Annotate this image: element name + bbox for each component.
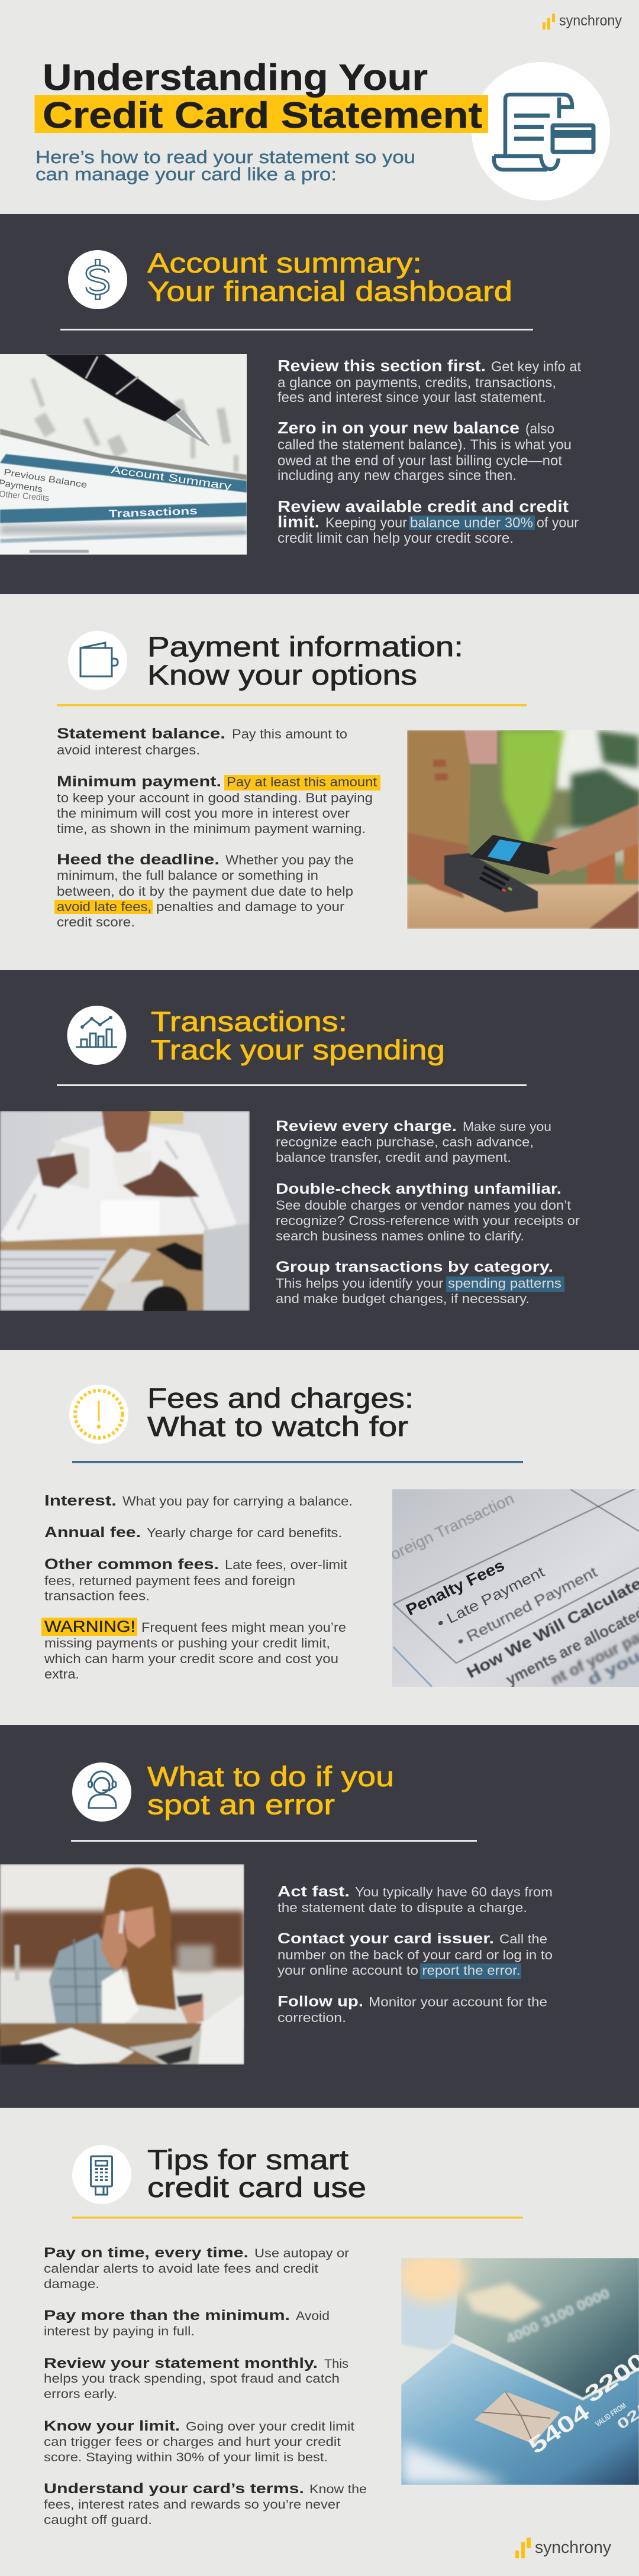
highlight: balance under 30%: balance under 30% (410, 515, 533, 531)
subtitle (36, 147, 415, 184)
photo: statement and pen: Transactions (108, 505, 198, 520)
icon: dollar sign (68, 250, 127, 309)
photo: credit cards close-up: 4000 3100 0000 (504, 2286, 612, 2347)
text: annual fee (44, 1524, 342, 1541)
text: group transactions by category: Group transactions by category. (276, 1259, 553, 1275)
heading (147, 2144, 366, 2203)
text: zero in on your new balance: Zero in on your new balance (277, 419, 519, 437)
text: act fast (277, 1884, 553, 1915)
heading: spot an error (147, 1789, 335, 1820)
text: interest (44, 1492, 353, 1509)
text: heed the deadline: between, do it by the payment due date to help (57, 884, 353, 899)
text: understand your card's terms: Know the (309, 2483, 367, 2496)
text: pay more than the minimum (44, 2308, 330, 2338)
photo: penalty fees statement: oreign Transaction (388, 1489, 517, 1563)
heading (151, 1006, 445, 1065)
text: heed the deadline: credit score. (57, 915, 135, 929)
heading: Payment information: (147, 631, 463, 662)
text: review your statement monthly: helps you track spending, spot fraud and catch (44, 2372, 340, 2386)
text: review your statement monthly: errors early. (44, 2387, 117, 2401)
photo: penalty fees statement: d your (585, 1643, 639, 1689)
photo: credit cards close-up: 5404 (524, 2400, 594, 2459)
icon: card terminal (72, 2145, 131, 2204)
text: act fast: Act fast. (277, 1884, 350, 1900)
text: double-check anything unfamiliar: See double charges or vendor names you don’t (276, 1198, 571, 1213)
text: review available credit: of your (537, 515, 579, 531)
text: contact your card issuer (277, 1930, 553, 1979)
text: pay on time: calendar alerts to avoid late fees and credit (44, 2262, 318, 2276)
heading (147, 1382, 414, 1442)
text: know your limit: Going over your credit limit (186, 2420, 354, 2434)
text: review this section first: a glance on payments, credits, transactions, (277, 375, 556, 391)
text: review available credit: credit limit can help your credit score. (277, 530, 514, 546)
panel: transactions (0, 970, 639, 1350)
text: warning: missing payments or pushing your credit limit, (44, 1635, 330, 1651)
text: review available credit (277, 497, 579, 546)
text: pay on time: Use autopay or (254, 2247, 349, 2260)
text: statement balance: Statement balance. (57, 725, 225, 742)
text: zero in on your new balance: owed at the end of your last billing cycle—not (277, 453, 562, 469)
text: warning: which can harm your credit score and cost you (44, 1651, 338, 1666)
text: other common fees: Other common fees. (44, 1556, 219, 1573)
text: group transactions by category (276, 1259, 564, 1306)
heading: Account summary: (147, 247, 422, 278)
text: warning (41, 1618, 346, 1681)
text: minimum payment: time, as shown in the minimum payment warning. (57, 821, 366, 836)
heading: What to do if you (147, 1761, 394, 1792)
photo: penalty fees statement: How We Will Calculate (464, 1574, 639, 1681)
panel: what to do if you spot an error (0, 1725, 639, 2108)
text: review every charge: balance transfer, credit and payment. (276, 1150, 511, 1165)
text: group transactions by category: and make budget changes, if necessary. (276, 1291, 530, 1306)
text: understand your card's terms: caught off guard. (44, 2513, 152, 2527)
text: review every charge: Review every charge. (276, 1118, 457, 1135)
heading: Tips for smart (147, 2144, 348, 2175)
text: know your limit: score. Staying within 30% of your limit is best. (44, 2451, 328, 2464)
title: Understanding Your (43, 57, 428, 98)
text: review available credit: limit. (277, 513, 320, 531)
text: minimum payment: to keep your account in good standing. But paying (57, 790, 373, 805)
text: pay more than the minimum: Pay more than the minimum. (44, 2308, 290, 2324)
text: heed the deadline (54, 851, 354, 929)
text: understand your card's terms (44, 2481, 367, 2527)
text: heed the deadline: Whether you pay the (225, 853, 354, 867)
heading (147, 1761, 394, 1820)
logo: synchrony bottom: synchrony (535, 2538, 611, 2557)
text: know your limit: Know your limit. (44, 2418, 180, 2434)
text: act fast: the statement date to dispute a charge. (277, 1900, 527, 1915)
text: minimum payment: Minimum payment. (57, 773, 221, 790)
highlight: report the error: report the error. (422, 1963, 521, 1978)
text: minimum payment (57, 773, 380, 836)
photo: contactless phone payment (407, 724, 639, 929)
text: heed the deadline: Heed the deadline. (57, 851, 220, 868)
heading (147, 631, 463, 691)
text: double-check anything unfamiliar: recognize? Cross-reference with your receipts or (276, 1213, 580, 1228)
text: review this section first: Review this section first. (277, 357, 486, 375)
text: understand your card's terms: Understand your card’s terms. (44, 2481, 304, 2497)
photo: statement and pen: Previous Balance (3, 467, 88, 490)
text: warning: extra. (44, 1667, 79, 1681)
text: zero in on your new balance: called the statement balance). This is what you (277, 437, 572, 453)
icon: statement and credit card (472, 62, 610, 200)
title: Credit Card Statement (43, 95, 482, 136)
subtitle: can manage your card like a pro: (36, 164, 337, 184)
text: follow up: correction. (277, 2010, 346, 2025)
heading: Know your options (147, 659, 417, 691)
icon: warning (69, 1385, 128, 1444)
text: act fast: You typically have 60 days from (355, 1885, 553, 1899)
text: know your limit: can trigger fees or charges and hurt your credit (44, 2435, 341, 2449)
heading: What to watch for (147, 1411, 408, 1442)
text: statement balance (57, 725, 347, 757)
photo: penalty fees statement (388, 1487, 639, 1689)
text: review this section first: fees and interest since your last statement. (277, 390, 546, 406)
photo: statement and pen: Account Summary (110, 464, 232, 492)
text: contact your card issuer: Contact your card issuer. (277, 1930, 494, 1947)
text: review every charge (276, 1118, 551, 1165)
photo: woman checking receipts (0, 1111, 250, 1311)
text: review this section first: Get key info at (491, 359, 581, 375)
text: follow up: Monitor your account for the (369, 1995, 547, 2009)
text: interest: What you pay for carrying a balance. (122, 1493, 353, 1509)
photo: credit cards close-up: VALID FROM (593, 2401, 628, 2428)
text: pay on time: damage. (44, 2277, 99, 2291)
text: review available credit: Review available credit and credit (277, 497, 569, 516)
text: zero in on your new balance: (also (525, 421, 554, 437)
heading: Your financial dashboard (147, 276, 512, 307)
photo: penalty fees statement: Penalty Fees (403, 1556, 507, 1619)
text: pay more than the minimum: interest by paying in full. (44, 2325, 195, 2338)
highlight: pay at least this amount: Pay at least this amount (227, 775, 377, 789)
photo: statement and pen (0, 354, 247, 555)
heading (147, 247, 512, 307)
text: follow up (277, 1994, 547, 2025)
heading: Track your spending (151, 1034, 445, 1065)
text: warning: Frequent fees might mean you’re (141, 1620, 346, 1635)
text: other common fees: transaction fees. (44, 1588, 150, 1603)
text: review your statement monthly (44, 2355, 348, 2401)
panel: tips for smart credit card use (44, 2145, 639, 2558)
logo: synchrony top: synchrony (559, 12, 622, 29)
highlight: avoid late fees: avoid late fees, (57, 899, 151, 914)
text: other common fees (44, 1556, 347, 1603)
text: contact your card issuer: Call the (499, 1932, 547, 1946)
text: annual fee: Annual fee. (44, 1524, 141, 1541)
heading: Transactions: (151, 1006, 347, 1037)
heading: Fees and charges: (147, 1382, 414, 1414)
highlight: spending patterns: spending patterns (448, 1276, 561, 1291)
text: annual fee: Yearly charge for card benefits. (147, 1525, 342, 1540)
icon: chart (67, 1006, 127, 1065)
text: double-check anything unfamiliar (276, 1181, 580, 1243)
panel: fees and charges (41, 1385, 639, 1687)
photo: credit cards close-up (396, 2250, 639, 2485)
photo: credit cards close-up: 3200 (580, 2348, 639, 2407)
photo: penalty fees statement: • Late Payment (434, 1564, 547, 1632)
text: review your statement monthly: Review your statement monthly. (44, 2355, 318, 2371)
text: statement balance: Pay this amount to (232, 727, 347, 741)
text: group transactions by category: This helps you identify your (276, 1276, 443, 1291)
photo: statement and pen: Other Credits (0, 489, 50, 503)
text: interest: Interest. (44, 1492, 117, 1509)
text: zero in on your new balance: including any new charges since then. (277, 468, 517, 484)
panel: payment information (54, 631, 639, 929)
text: other common fees: Late fees, over-limit (225, 1557, 347, 1572)
photo: penalty fees statement: • Returned Payment (454, 1564, 600, 1650)
text: review available credit: Keeping your (325, 515, 407, 531)
text: know your limit (44, 2418, 354, 2464)
text: review this section first (277, 357, 581, 406)
text: zero in on your new balance (277, 419, 572, 484)
text: review every charge: Make sure you (463, 1119, 551, 1134)
icon: wallet (68, 631, 127, 690)
icon: headset agent (72, 1762, 131, 1822)
text: review your statement monthly: This (324, 2357, 348, 2371)
text: double-check anything unfamiliar: Double-check anything unfamiliar. (276, 1181, 561, 1197)
panel: account summary (0, 214, 639, 594)
photo: credit cards close-up: 02/ (614, 2403, 639, 2433)
text: pay on time: Pay on time, every time. (44, 2245, 248, 2261)
panel: header (0, 0, 639, 214)
text: heed the deadline: minimum, the full balance or something in (57, 868, 318, 883)
text: follow up: Follow up. (277, 1994, 363, 2010)
text: pay more than the minimum: Avoid (296, 2309, 330, 2323)
text: statement balance: avoid interest charges. (57, 743, 200, 757)
text: understand your card's terms: fees, interest rates and rewards so you’re never (44, 2498, 340, 2512)
text: double-check anything unfamiliar: search business names online to clarify. (276, 1229, 524, 1243)
photo: woman on phone with card (0, 1864, 244, 2065)
text: other common fees: fees, returned payment fees and foreign (44, 1573, 295, 1588)
title (34, 57, 488, 136)
text: heed the deadline: penalties and damage to your (156, 899, 344, 914)
highlight: warning label: WARNING! (44, 1618, 135, 1635)
text: review every charge: recognize each purchase, cash advance, (276, 1135, 534, 1149)
text: pay on time (44, 2245, 349, 2291)
subtitle: Here’s how to read your statement so you (36, 147, 415, 167)
heading: credit card use (147, 2172, 366, 2203)
text: contact your card issuer: your online account to (277, 1963, 418, 1978)
text: minimum payment: the minimum will cost you more in interest over (57, 806, 350, 821)
text: contact your card issuer: number on the back of your card or log in to (277, 1948, 553, 1962)
